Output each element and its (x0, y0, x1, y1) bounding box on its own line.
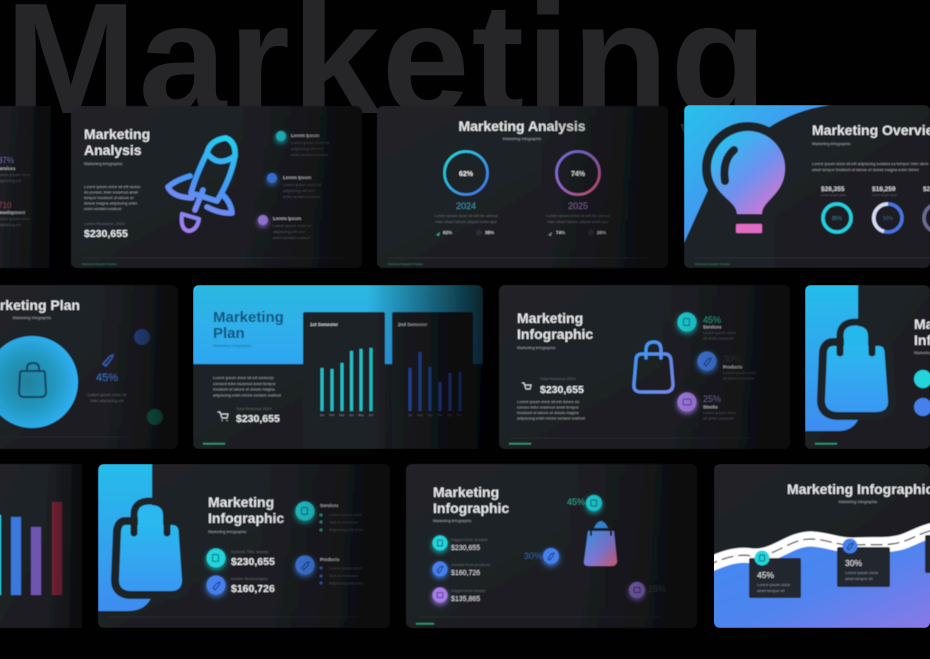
stub small labels (0, 166, 31, 227)
value row 2 (206, 576, 275, 596)
stats 2025: 26% (597, 230, 606, 235)
blue header (193, 285, 483, 364)
item 45%: 45% (567, 497, 585, 507)
icon: big bag (119, 501, 182, 591)
year 2024: 2024 (456, 201, 476, 211)
chart: second semester: 2nd Semester (398, 322, 428, 327)
icon: gradient bag (584, 521, 617, 566)
item 25% (678, 392, 737, 420)
bullet 3 (258, 215, 312, 240)
body text: consec tefur eiusmod amet tempor (517, 404, 579, 410)
card 30%: Lorem ipsum dolor (845, 570, 879, 575)
value row 1 (432, 536, 488, 552)
chart: first semester: Jan (320, 413, 325, 417)
icon: blue circle (914, 398, 930, 416)
bullet 2 (267, 173, 322, 199)
ring 74% (556, 152, 600, 194)
heading: Infographic (208, 510, 284, 526)
ring 74%: 74% (571, 171, 586, 178)
body text: Lorem ipsum dolor sit elit sedou (84, 184, 140, 189)
chart: second semester: Aug (417, 413, 423, 417)
panel: Marketing Infographic big bag slide (98, 464, 390, 628)
panel: Marketing Overview slide (684, 105, 930, 268)
heading (208, 494, 284, 526)
body text: Lorem ipsum dolor sit elit sedecrip (213, 375, 274, 380)
stats 2024 (436, 230, 494, 236)
icon: rocket (168, 138, 235, 231)
icon: cart (522, 383, 531, 389)
item 30%: 30% (723, 354, 741, 364)
products list: Sed do eiusmod (329, 573, 358, 578)
services list: Adipiscing elit enim (329, 527, 364, 532)
subheading: Marketing Infographic (503, 136, 541, 141)
value row 2: $160,726 (231, 583, 275, 595)
value row 1: $230,655 (231, 556, 275, 568)
card 45% (749, 550, 801, 598)
bullet 1: Lorem ipsum dolor sit (291, 140, 330, 145)
card 45%: 45% (757, 570, 774, 580)
heading: Infographic (433, 500, 509, 516)
heading (84, 126, 150, 158)
card 45%: Lorem ipsum dolor (757, 582, 791, 587)
chart: second semester: Nov (447, 413, 453, 417)
item 45%: Services (703, 324, 722, 330)
item 30%: Products (723, 364, 743, 370)
value row 1 (206, 548, 275, 570)
bullet 2: Lorem ipsum dolor sit (283, 182, 322, 187)
blue wave area (706, 530, 930, 628)
body text: do ponset, Inter eiusmod amet (84, 190, 139, 194)
services list: Sed do eiusmod (329, 520, 358, 524)
subheading: Marketing Infographic (839, 499, 877, 504)
panel: Marketing Infographic scattered icons slide (406, 464, 697, 628)
description 2025 (546, 213, 610, 224)
heading: Marketing (208, 494, 274, 510)
stat 2 (872, 186, 902, 232)
item 45%: 45% (703, 315, 721, 325)
description: Lorem Ipsum dolor sit (88, 392, 127, 397)
stats 2025: 74% (556, 230, 565, 235)
heading: Marketing (433, 484, 499, 500)
body text: adipiscing enim minim veniam nostrud (213, 392, 281, 398)
icon: big bag (825, 322, 888, 412)
panel: Marketing Infographic wave slide (706, 464, 930, 628)
item 25% (629, 582, 666, 600)
road dashes (706, 530, 930, 566)
description 2024 (434, 213, 498, 224)
bullet 3: enim veniam nostrud (273, 235, 310, 240)
body text: tincidunt ut labore et dolore magna (517, 410, 579, 415)
value row 3: Gigglet from stocks (451, 588, 485, 593)
bullet 2: Lorem Ipsum (283, 175, 311, 180)
item 30% (698, 352, 757, 380)
panel: Marketing Plan disc slide (0, 285, 178, 449)
icon: rocket (103, 355, 113, 366)
subheading: Marketing Infographic (13, 315, 51, 320)
panel: Marketing Analysis rocket slide (71, 106, 362, 268)
chart: second semester (392, 312, 473, 449)
body text: tincidunt ut labore et dolore magna (213, 386, 275, 392)
body text: Lorem ipsum dolor sit elit adipiscing sodales eu tempor Inter ulum (812, 161, 929, 166)
item 45% (678, 312, 737, 340)
card 30%: amet tempor sit (845, 576, 873, 581)
item 25%: Stocks (703, 404, 718, 410)
products list: Lorem ipsum dolor (329, 566, 363, 570)
bullet 1 (276, 131, 330, 157)
blue disc with bag (0, 336, 78, 428)
revenue label: Total Revenue 2024 (236, 406, 272, 411)
value row 2: Known Technologies (231, 576, 268, 581)
heading (433, 484, 509, 516)
heading: Marketing (84, 126, 150, 142)
body text (84, 184, 140, 211)
item 25%: sit amet consecte (703, 416, 735, 420)
value row 1: Gigglet from Jenalist (451, 537, 488, 542)
ring 62% (444, 152, 488, 194)
services list: Services (320, 503, 339, 508)
blue corner shape (684, 105, 830, 243)
card cropped (925, 535, 930, 573)
bullet 2: adipiscing elit sed (283, 188, 315, 193)
heading: Marketing (517, 310, 583, 326)
footer label: Marketing Infographic Template (82, 263, 117, 266)
description 2025: Lorem ipsum dolor sit elit do usmod (546, 213, 610, 218)
subheading: Marketing Infographic (213, 343, 251, 348)
chart: second semester: Jul (408, 413, 412, 417)
description (88, 392, 127, 403)
bullet 3: Lorem Ipsum (273, 216, 301, 221)
value 45%: 45% (96, 372, 118, 384)
chart: second semester: Sep (427, 413, 433, 417)
year 2025: 2025 (568, 201, 588, 211)
products list: Adipiscing elit enim (329, 580, 364, 586)
stat 1: Lorem Ipsum dolor (821, 193, 846, 197)
item 25%: Lorem ipsum dolor (703, 410, 737, 415)
body text: Lorem ipsum dolor sit elit dolore do (517, 399, 580, 404)
panel: Marketing Plan bar charts slide (193, 285, 483, 449)
panel: cropped bag slide (805, 285, 930, 449)
body text: dolore magna adipiscing enim (84, 200, 138, 206)
heading: Marketing (213, 309, 284, 326)
chart: first semester: May (358, 413, 364, 417)
chart: first semester: Jun (369, 413, 374, 417)
item 30%: Lorem ipsum dolor (723, 370, 757, 375)
ring 62%: 62% (459, 171, 474, 178)
subheading: Marketing Infographic (517, 345, 555, 350)
chart: second semester: Oct (438, 413, 442, 417)
value row 2: $160,726 (451, 570, 480, 577)
services list: Lorem ipsum dolor (329, 512, 363, 517)
chart: first semester (303, 312, 385, 449)
revenue label: Total Revenue 2024 (540, 376, 576, 381)
subheading: Marketing Infographic (812, 141, 850, 146)
icon: bag outline (634, 342, 673, 392)
stat 1 (821, 186, 851, 232)
description 2024: Inter cliant labore aliquet enim quo (435, 219, 497, 224)
heading (517, 310, 593, 342)
footer label (203, 443, 225, 444)
body text: consect tefur eiusmod amet tempor (213, 381, 276, 386)
blue side shape (98, 464, 152, 611)
card 30% (837, 538, 890, 587)
bullet 1: enim veniam nostrud (291, 152, 328, 157)
revenue value: $230,655 (540, 384, 584, 396)
dim green dot (147, 409, 163, 425)
value row 1: $230,655 (451, 545, 480, 552)
item 25%: 25% (648, 584, 666, 594)
value row 3: $135,865 (451, 596, 480, 603)
stat 3 (923, 186, 930, 232)
services list (296, 502, 364, 532)
body text: tempor tincidunt ut labore et (84, 195, 134, 200)
bullet 1: adipiscing elit sed (291, 146, 323, 151)
subheading: Marketing Infographic (208, 529, 246, 534)
stat 1: 85% (832, 216, 843, 222)
blue side shape (805, 285, 858, 431)
icon: cyan circle (914, 370, 930, 388)
card 45%: amet tempor sit (757, 588, 785, 593)
chart: second semester: Dec (457, 413, 463, 417)
products list: Products (320, 557, 340, 562)
stat 2: 50% (883, 216, 894, 222)
body text: enim veniam nostrud (84, 206, 121, 211)
white road (706, 530, 930, 566)
card 30%: 30% (845, 558, 862, 568)
body text (812, 161, 929, 172)
bar chart (0, 502, 62, 595)
bullet 3: adipiscing elit sed (273, 229, 305, 234)
item 45% (567, 495, 602, 513)
body text (213, 375, 281, 398)
panel: Marketing Infographic bag outline slide (499, 285, 790, 449)
revenue value: $230,655 (84, 228, 128, 240)
footer label: Marketing Infographic Template (695, 263, 730, 266)
heading: Infographic (517, 326, 593, 342)
body text: amet tempor tincidunt ut labore et dolore magna enim minim (812, 167, 919, 172)
heading: Marketing Infographic (787, 481, 930, 497)
chart: first semester: Mar (339, 413, 345, 417)
subheading: Marketing Infographic (84, 161, 122, 166)
chart: first semester: 1st Semester (310, 322, 338, 327)
value row 1: Episode Title, weekly (231, 549, 268, 554)
icon: cart (218, 412, 228, 420)
panel: Marketing Analysis rings slide (377, 106, 668, 268)
value row 2: Jenalist from products (451, 562, 490, 567)
chart: first semester: Apr (349, 413, 354, 417)
stats 2024: 62% (443, 230, 452, 235)
subheading: Marketing Infographic (433, 518, 471, 523)
item 45%: Lorem ipsum dolor (703, 330, 737, 335)
body text (517, 399, 585, 420)
item 30%: sit amet consecte (723, 376, 755, 380)
footer label: Marketing Infographic Template (388, 263, 423, 266)
revenue value: $230,655 (236, 413, 280, 425)
bullet 1: Lorem Ipsum (291, 133, 319, 138)
bullet 2: enim veniam nostrud (283, 194, 320, 199)
stats 2025 (548, 230, 606, 236)
item 25%: 25% (703, 394, 721, 404)
dim blue dot (134, 329, 150, 345)
value row 3 (432, 588, 485, 604)
stat 2: Lorem Ipsum dolor (872, 193, 897, 197)
chart: first semester: Feb (329, 413, 335, 417)
description 2025: Inter cliant labore aliquet enim quo (547, 219, 609, 224)
panel: cropped slide top left (0, 106, 56, 268)
stat 2: $18,259 (872, 186, 896, 193)
bullet 3: Lorem ipsum dolor sit (273, 223, 312, 228)
description 2024: Lorem ipsum dolor sit elit do usmod (434, 213, 498, 218)
stat 1: $26,355 (821, 186, 845, 193)
panel: cropped bar chart slide (0, 464, 82, 628)
stats 2024: 38% (485, 230, 494, 235)
description: Inter adipiscing elit (90, 398, 124, 403)
heading: Analysis (84, 142, 142, 158)
body text: adipiscing enim minim veniam nostrud (517, 416, 585, 420)
heading: Marketing Analysis (458, 118, 586, 134)
item 30% (524, 548, 559, 566)
heading (214, 310, 284, 338)
revenue label: Lorem Research, 2024 (84, 221, 125, 226)
item 45%: sit amet consecte (703, 336, 735, 340)
icon: light bulb (684, 131, 785, 268)
value row 2 (432, 562, 490, 578)
products list (296, 556, 364, 586)
item 30%: 30% (524, 551, 542, 561)
heading: Plan (213, 325, 245, 342)
heading (914, 318, 930, 346)
